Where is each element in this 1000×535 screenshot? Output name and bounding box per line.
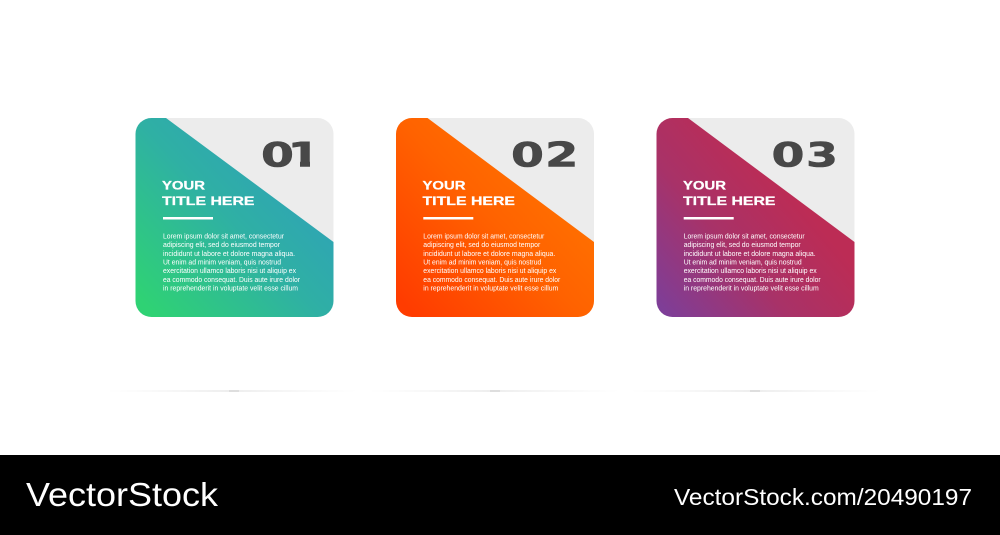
card 02 body text: exercitation ullamco laboris nisi ut aliquip ex	[423, 266, 556, 275]
card 03 body text: Lorem ipsum dolor sit amet, consectetur	[684, 232, 805, 240]
number 02	[511, 136, 578, 176]
card 03 title: TITLE HERE	[683, 196, 776, 208]
card 02 body text: Ut enim ad minim veniam, quis nostrud	[423, 258, 541, 266]
card 01 body text	[163, 232, 300, 292]
card 03 body text: adipiscing elit, sed do eiusmod tempor	[684, 240, 801, 249]
card 02 body text: adipiscing elit, sed do eiusmod tempor	[423, 240, 541, 249]
number 03: 3	[806, 136, 838, 176]
watermark banner	[0, 455, 1000, 535]
number 03: 0	[772, 136, 804, 176]
panel: card 03	[656, 118, 854, 317]
card 03 body text: Ut enim ad minim veniam, quis nostrud	[684, 258, 802, 266]
card 02 gradient shape	[396, 118, 594, 317]
card 01 body text: in reprehenderit in voluptate velit esse cillum	[163, 284, 298, 292]
floor shadows	[107, 390, 880, 392]
card 01 title: TITLE HERE	[162, 196, 255, 208]
card 03 title: YOUR	[683, 180, 727, 192]
brand name: VectorStock	[26, 476, 219, 513]
card 02 body text: Lorem ipsum dolor sit amet, consectetur	[423, 232, 545, 240]
number 03	[772, 136, 838, 176]
card 01 body text: incididunt ut labore et dolore magna aliqua.	[163, 249, 295, 258]
card 02 background	[396, 118, 594, 317]
number 02: 0	[511, 136, 544, 176]
card 03 body text	[684, 232, 821, 292]
card 02 title: TITLE HERE	[422, 196, 515, 208]
card 02 rule	[423, 217, 473, 220]
image url: VectorStock.com/20490197	[674, 484, 972, 510]
number 01: 1	[288, 136, 320, 176]
card 01 body text: ea commodo consequat. Duis aute irure dolor	[163, 275, 300, 284]
panel: card 01	[136, 118, 334, 317]
card 02 body text: incididunt ut labore et dolore magna aliqua.	[423, 249, 555, 258]
number 02: 2	[545, 136, 578, 176]
card 03 background	[656, 118, 854, 317]
number 01: 0	[261, 136, 294, 176]
card 01 body text: adipiscing elit, sed do eiusmod tempor	[163, 240, 280, 249]
card 01 body text: exercitation ullamco laboris nisi ut aliquip ex	[163, 266, 296, 275]
card 01 gradient shape	[136, 118, 334, 317]
card 03 rule	[684, 217, 734, 220]
panel: card 02	[396, 118, 594, 317]
card 03 body text: incididunt ut labore et dolore magna aliqua.	[684, 249, 816, 258]
card 03 body text: ea commodo consequat. Duis aute irure dolor	[684, 275, 821, 284]
card 02 title: YOUR	[422, 180, 466, 192]
card 01 body text: Ut enim ad minim veniam, quis nostrud	[163, 258, 281, 266]
card 01 title	[162, 180, 255, 208]
card 01 rule	[163, 217, 213, 220]
card 03 title	[683, 180, 776, 208]
card 01 body text: Lorem ipsum dolor sit amet, consectetur	[163, 232, 284, 240]
card 02 body text: in reprehenderit in voluptate velit esse cillum	[423, 284, 558, 292]
card 03 body text: exercitation ullamco laboris nisi ut aliquip ex	[684, 266, 817, 275]
card 02 body text	[423, 232, 561, 292]
card 02 title	[422, 180, 515, 208]
card 03 body text: in reprehenderit in voluptate velit esse cillum	[684, 284, 819, 292]
card 01 title: YOUR	[162, 180, 206, 192]
card 03 gradient shape	[656, 118, 854, 317]
card 01 background	[136, 118, 334, 317]
card 02 body text: ea commodo consequat. Duis aute irure dolor	[423, 275, 561, 284]
number 01	[261, 135, 320, 176]
